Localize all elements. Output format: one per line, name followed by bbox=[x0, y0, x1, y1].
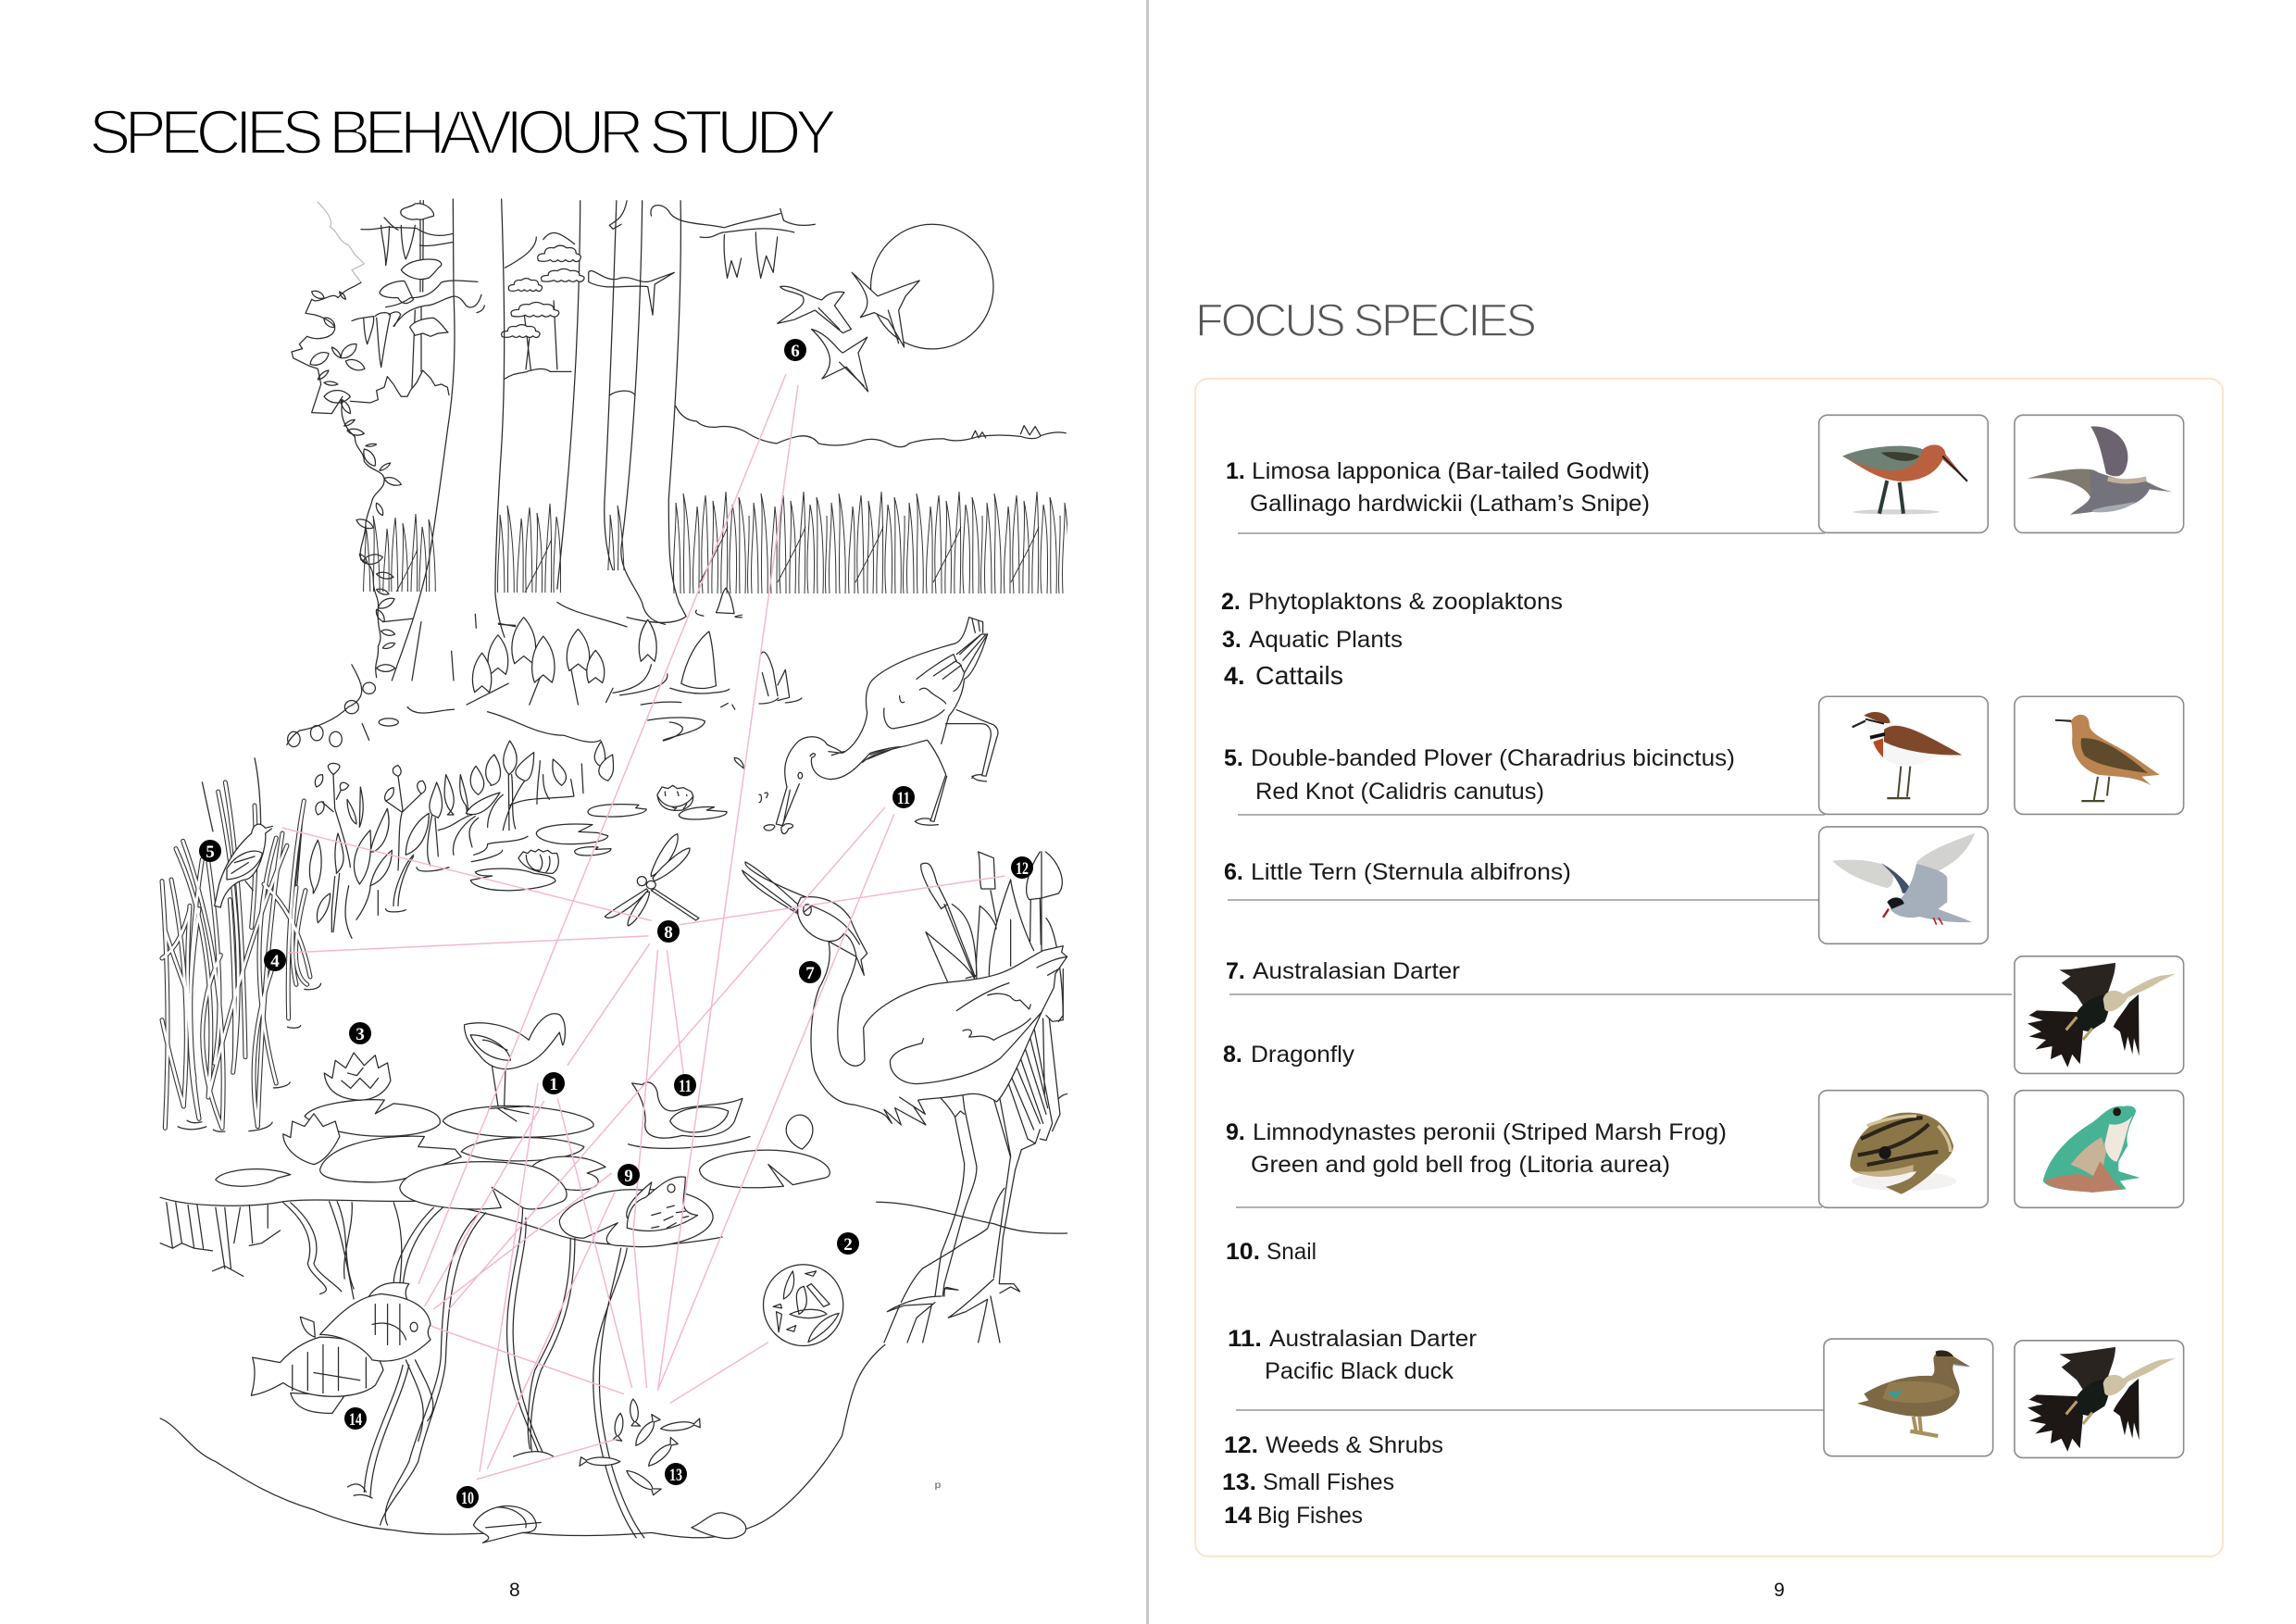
entry 9: Limnodynastes peronii (Striped Marsh Frog) bbox=[1253, 1119, 1727, 1145]
far hill line bbox=[877, 1202, 1067, 1233]
faded vine top bbox=[318, 202, 364, 282]
cypress knee bbox=[759, 652, 802, 704]
plankton circle (2) bbox=[764, 1265, 843, 1345]
heron body bbox=[811, 942, 1067, 1125]
entry 2: 2. bbox=[1221, 589, 1241, 615]
reed bundle bbox=[1000, 969, 1067, 1150]
snails (10) bbox=[473, 1506, 746, 1543]
card: little tern bbox=[1819, 827, 1988, 943]
left tree, branches and climbing vine bbox=[292, 199, 516, 681]
heron bill and eye bbox=[776, 784, 799, 826]
entry 9: 9. bbox=[1226, 1119, 1245, 1145]
water surface line bbox=[160, 1197, 722, 1245]
entry 14: 14 bbox=[1224, 1503, 1252, 1529]
underwater left stems bbox=[160, 1202, 443, 1304]
entry 5: Red Knot (Calidris canutus) bbox=[1255, 779, 1544, 805]
number badges: 4 bbox=[270, 952, 280, 971]
entry 9 bbox=[1226, 1119, 1727, 1178]
page number 9: 9 bbox=[1774, 1580, 1785, 1601]
water lilies bbox=[518, 785, 693, 873]
upper branches and stems bbox=[361, 201, 453, 387]
lily with frog bbox=[559, 1190, 713, 1247]
entry 4: 4. bbox=[1224, 662, 1245, 690]
photo cards, upper bbox=[1819, 415, 2184, 943]
heron feathers bbox=[829, 618, 988, 762]
plant leaves bbox=[309, 741, 614, 923]
tree foliage bbox=[502, 245, 584, 338]
number badges: 5 bbox=[206, 843, 215, 862]
entry 1: Gallinago hardwickii (Latham’s Snipe) bbox=[1250, 491, 1650, 517]
number badges: 7 bbox=[805, 964, 815, 983]
separator rules bbox=[1228, 533, 2012, 1410]
pond scene bbox=[160, 796, 941, 1543]
card: bar-tailed godwit bbox=[1819, 415, 1988, 532]
entry 12: Weeds & Shrubs bbox=[1266, 1432, 1443, 1458]
lily pads on surface bbox=[216, 1100, 830, 1209]
entry 8: Dragonfly bbox=[1251, 1042, 1355, 1068]
entry 3: Aquatic Plants bbox=[1249, 627, 1403, 653]
entry 2: Phytoplaktons & zooplaktons bbox=[1248, 589, 1563, 615]
hanging moss branches bbox=[505, 201, 815, 369]
entry 12: 12. bbox=[1224, 1432, 1258, 1458]
entry 13: Small Fishes bbox=[1263, 1469, 1394, 1495]
frog (9) bbox=[627, 1177, 698, 1230]
foliage tufts bbox=[380, 204, 448, 336]
number badges: 9 bbox=[624, 1167, 633, 1186]
card: pacific black duck bbox=[1824, 1339, 1993, 1456]
marsh reed bands bbox=[362, 490, 1067, 593]
moorhen on lily (1) bbox=[464, 1014, 565, 1121]
long lily stems bbox=[347, 1207, 644, 1538]
entry 11 bbox=[1228, 1326, 1477, 1384]
card: red knot bbox=[2015, 696, 2184, 814]
lower vine section bbox=[287, 665, 398, 747]
water ripple lines bbox=[488, 602, 705, 742]
upper lily pads bbox=[470, 805, 727, 891]
feet bbox=[884, 1280, 1020, 1343]
forest: right trees, sun, ducks and marsh bbox=[287, 201, 1066, 747]
feeding heron and knees bbox=[759, 618, 998, 833]
card: australasian darter bbox=[2015, 956, 2184, 1073]
number badges: 11 bbox=[679, 1077, 692, 1096]
entry 5: Double-banded Plover (Charadrius bicinctus) bbox=[1251, 745, 1735, 771]
entry 3: 3. bbox=[1222, 627, 1242, 653]
vine lower bbox=[342, 400, 384, 678]
number badges: 3 bbox=[356, 1025, 365, 1044]
entry 9: Green and gold bell frog (Litoria aurea) bbox=[1251, 1152, 1670, 1178]
card: double-banded plover bbox=[1819, 696, 1988, 814]
flowering plants bbox=[921, 852, 1063, 1021]
entry 4: Cattails bbox=[1255, 661, 1343, 690]
species list text bbox=[1221, 458, 1735, 1529]
number badges: 6 bbox=[791, 342, 800, 361]
front lilies bbox=[283, 1053, 813, 1165]
arrowhead plant cluster bbox=[467, 618, 668, 705]
plant stems and shore bbox=[293, 761, 583, 938]
water drips and foot ripples bbox=[759, 775, 987, 833]
panel: focus species list bbox=[1195, 379, 2223, 1556]
hanging moss bbox=[352, 225, 415, 368]
entry 7: 7. bbox=[1226, 958, 1245, 984]
title: SPECIES BEHAVIOUR STUDY bbox=[89, 97, 837, 168]
entry 14: Big Fishes bbox=[1257, 1503, 1363, 1529]
entry 1 bbox=[1226, 458, 1650, 517]
flying ducks bbox=[778, 272, 919, 392]
trunk of left tree bbox=[382, 199, 516, 681]
distant tree line bbox=[350, 370, 449, 403]
small flowers bbox=[315, 763, 426, 815]
card: green and gold bell frog bbox=[2015, 1091, 2184, 1207]
number badges: 2 bbox=[843, 1235, 853, 1255]
entry 8: 8. bbox=[1223, 1042, 1242, 1068]
food web connector lines bbox=[281, 374, 1004, 1480]
entry 10: 10. bbox=[1226, 1239, 1260, 1265]
entry 13: 13. bbox=[1222, 1469, 1256, 1495]
cattail reeds bbox=[162, 757, 321, 1131]
number badges: 12 bbox=[1016, 859, 1029, 879]
head, crest and bill bbox=[798, 897, 867, 975]
number badges: 11 bbox=[897, 789, 910, 808]
entry 5 bbox=[1224, 745, 1735, 805]
cypress knees bbox=[670, 588, 742, 709]
big fishes (14) bbox=[251, 1282, 430, 1413]
photo cards, lower bbox=[1819, 956, 2184, 1457]
entry 11: Pacific Black duck bbox=[1265, 1358, 1454, 1384]
entry 1: Limosa lapponica (Bar-tailed Godwit) bbox=[1252, 458, 1650, 484]
heading: focus species: FOCUS SPECIES bbox=[1195, 294, 1537, 346]
ground and pond bed bbox=[160, 1344, 885, 1538]
sun bbox=[871, 224, 993, 349]
entry 7: Australasian Darter bbox=[1253, 958, 1460, 984]
vine leaves bbox=[310, 291, 401, 671]
page spine divider bbox=[1146, 0, 1149, 1624]
number badges: 14 bbox=[349, 1410, 362, 1430]
entry 5: 5. bbox=[1224, 745, 1243, 771]
entry 11: 11. bbox=[1228, 1326, 1262, 1352]
perching bird (5) bbox=[215, 824, 272, 907]
heron body outline bbox=[785, 634, 998, 821]
water ripples bbox=[386, 722, 743, 912]
entry 6: Little Tern (Sternula albifrons) bbox=[1251, 859, 1571, 885]
body inner lines bbox=[890, 956, 1067, 1084]
entry 6: 6. bbox=[1224, 859, 1243, 885]
arrowhead plants, lily pads and dragonfly bbox=[293, 722, 743, 938]
card: australasian darter 2 bbox=[2015, 1341, 2184, 1457]
entry 10 bbox=[1226, 1239, 1316, 1265]
dragonfly bbox=[605, 834, 699, 926]
big wading heron with plants bbox=[742, 852, 1067, 1343]
card: striped marsh frog bbox=[1819, 1091, 1988, 1207]
card: latham's snipe bbox=[2015, 415, 2184, 532]
legs bbox=[901, 1093, 1021, 1303]
small p mark: p bbox=[935, 1480, 941, 1491]
swimming duck (11) bbox=[629, 1082, 750, 1148]
illustration: swamp food web bbox=[160, 199, 1067, 1543]
entry 10: Snail bbox=[1267, 1239, 1316, 1265]
number badges: 10 bbox=[461, 1489, 474, 1508]
top lily pad and bud bbox=[657, 796, 693, 806]
background canopy lines bbox=[505, 369, 635, 395]
tree trunks bbox=[407, 201, 686, 713]
number badges bbox=[199, 339, 1033, 1508]
page number 8: 8 bbox=[509, 1580, 520, 1601]
entry 11: Australasian Darter bbox=[1269, 1326, 1477, 1352]
number badges: 13 bbox=[669, 1466, 682, 1485]
number badges: 1 bbox=[549, 1075, 558, 1094]
number badges: 8 bbox=[664, 923, 673, 943]
far shoreline bbox=[676, 406, 1066, 447]
small fishes (13) bbox=[580, 1399, 702, 1495]
big branch bbox=[386, 281, 484, 326]
entry 1: 1. bbox=[1226, 458, 1245, 484]
vine upper bbox=[292, 282, 361, 414]
